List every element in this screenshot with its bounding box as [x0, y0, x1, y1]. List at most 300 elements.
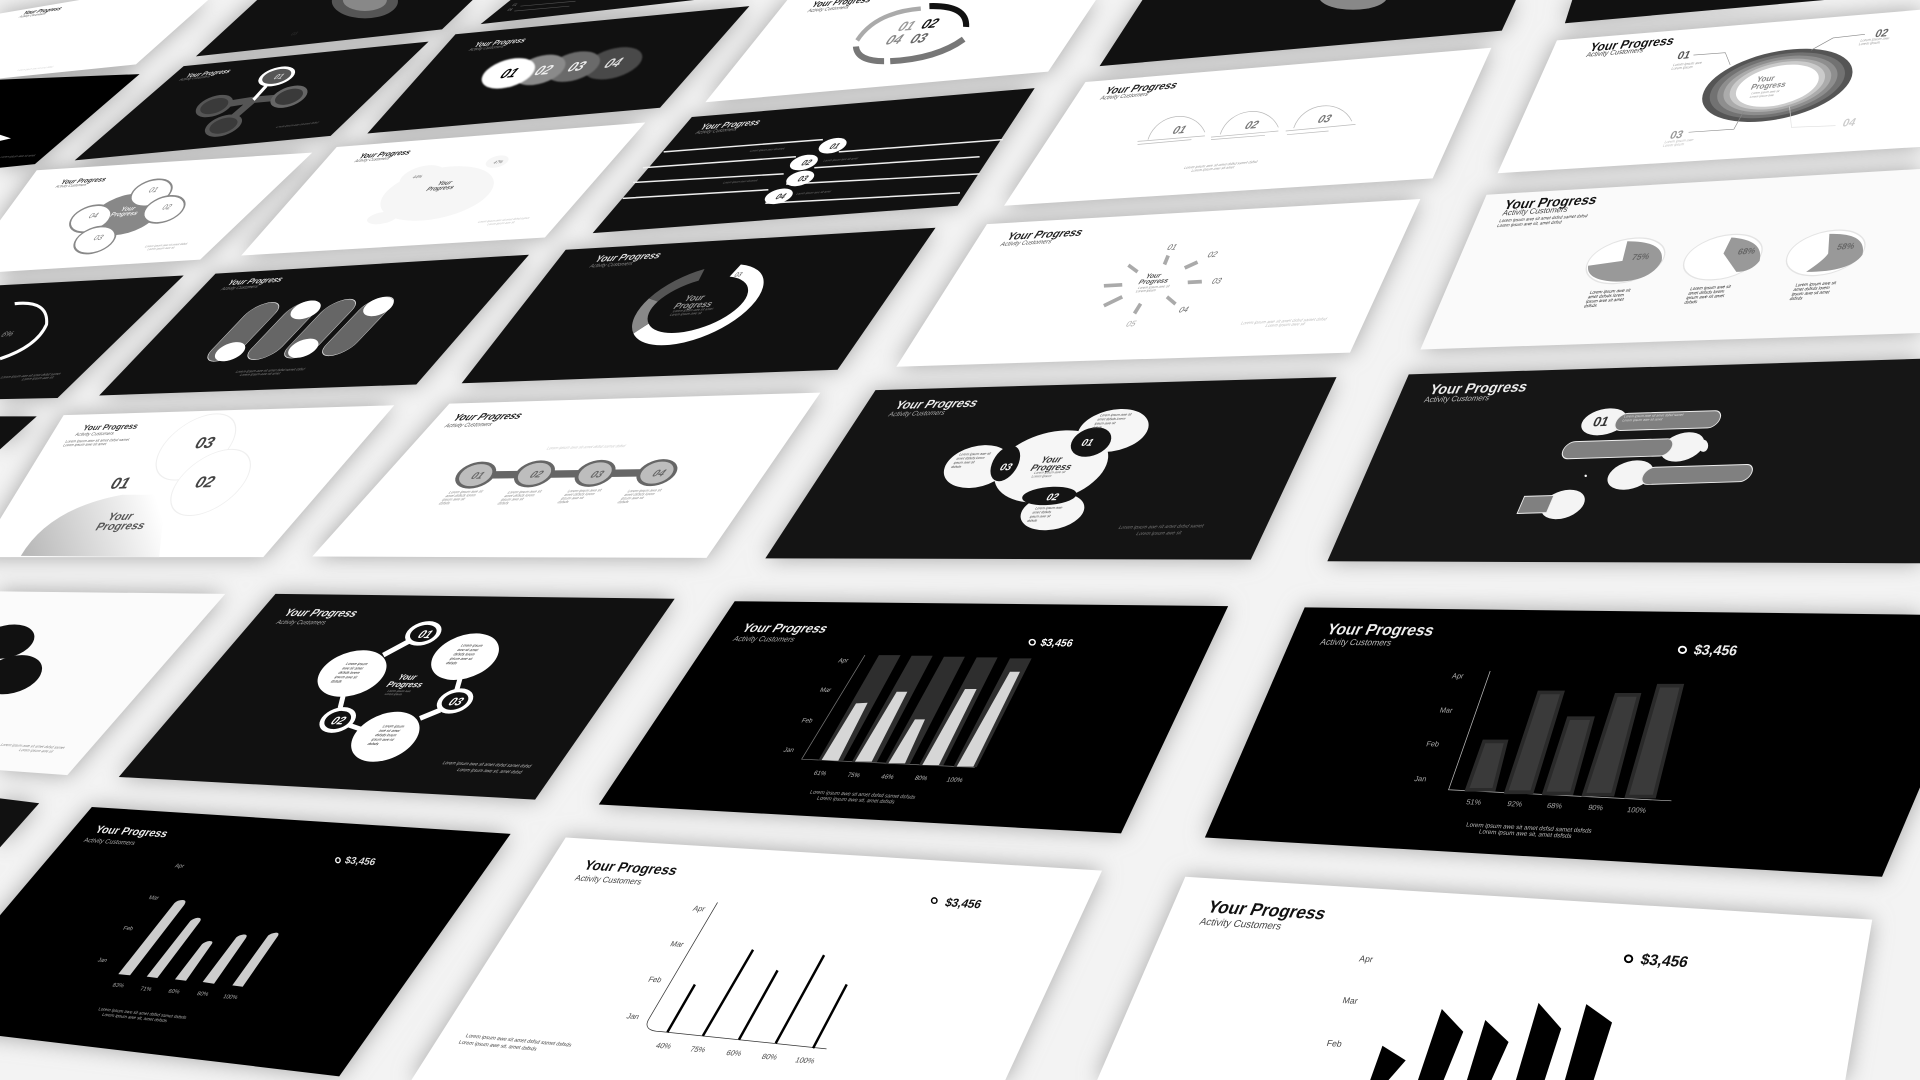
panel: white slide with concentric donut: Lorem ipsum	[1662, 142, 1685, 148]
panel: dark slide with four pills	[99, 255, 529, 396]
percent labels: 100%	[222, 994, 238, 1001]
panel: white slide with black petals: Lorem ipsum awe sit	[18, 748, 56, 754]
panel: top-left white slide: Your Progress	[20, 6, 64, 16]
panel: white slide with radial ticks: 04	[1177, 305, 1191, 314]
panel: dark slide with donut: Your Progress	[592, 250, 664, 265]
panel: top-left white slide: Activity Customers	[18, 11, 48, 19]
panel: dark slide with blob trefoil: Lorem ipsum awe sit	[1134, 531, 1183, 537]
panel: dark slide with process pills: Your Progress	[1427, 380, 1530, 398]
blob ring: 03	[445, 695, 468, 708]
panel: dark slide with ring of blobs: dsfsds	[329, 679, 344, 684]
panel: white slide with black petals	[0, 591, 225, 775]
black bars	[1370, 1003, 1612, 1080]
panel: white slide with thin bars: Lorem ipsum awe sit, amet dsfsds	[457, 1040, 538, 1053]
panel: white slide with 01 02 03 petals: Your Progress	[81, 421, 141, 432]
panel: white slide with chain of circles	[312, 393, 820, 558]
axis labels	[782, 658, 850, 754]
panel: white slide with black petals: Lorem ipsum awe sit amet dsfsd samet	[0, 742, 66, 750]
thin bars	[667, 950, 847, 1048]
value: $3,456	[943, 896, 984, 911]
panel: dark slide with blob trefoil: amet dsfsds lorem	[955, 456, 986, 461]
panel: left dark slide with ring: Lorem ipsum awe sit amet dsfsd samet	[0, 372, 63, 379]
panel: white slide with three bumps: Your Progress	[1102, 80, 1180, 97]
hub diagram: Progress	[108, 211, 139, 218]
panel: dark slide with ring of blobs: dsfsds lorem	[374, 733, 399, 737]
panel: white slide with chain of circles: amet dsfsds lorem	[503, 493, 537, 498]
faint blob	[364, 155, 511, 225]
panel: dark slide with donut	[462, 228, 936, 383]
panel: dark slide with blob trefoil: amet dsfsds	[1031, 510, 1052, 514]
panel: white slide with radial ticks	[896, 199, 1420, 367]
panel: dark slide with blob trefoil: ipsum awe sit	[1029, 514, 1053, 519]
panel: dark slide with donut: Lorem ipsum awe sit amet	[672, 306, 715, 313]
panel: white slide with three bumps: Activity Customers	[1098, 91, 1150, 102]
panel: dark slide with column chart: Your Progress	[739, 621, 831, 635]
panel: white slide with large black bars	[1097, 877, 1872, 1080]
axis labels: Jan	[782, 747, 796, 754]
panel: dark slide with blob trefoil: Progress	[1028, 462, 1074, 474]
panel: dark slide with blob trefoil	[765, 377, 1337, 560]
panel: light slide with three pies: Lorem ipsum awe sit, amet dsfsd	[1496, 219, 1563, 228]
percent labels: 46%	[879, 774, 895, 781]
hub diagram: 01	[146, 185, 162, 194]
panel: dark slide with hub and circles: Your Progress	[183, 67, 234, 79]
panel: white slide with chain of circles: ipsum awe sit	[560, 496, 586, 500]
panel: white slide with 01 02 03 petals: Lorem ipsum awe sit amet dsfsd samet	[64, 437, 131, 444]
trefoil diagram	[937, 408, 1155, 531]
panel: light slide with three pies: amet dsfsds lorem	[1687, 289, 1726, 296]
panel: white slide with radial ticks: 03	[1210, 276, 1224, 286]
row 02	[1559, 432, 1710, 462]
panel: top dark slide with list: 01	[511, 2, 519, 7]
pie chart 68%	[1675, 232, 1771, 282]
panel: white slide with 4-petal hub	[0, 153, 312, 272]
panel: white slide with chain of circles: Lorem ipsum awe sit	[566, 488, 604, 493]
percent labels: 100%	[794, 1056, 817, 1065]
blob ring: 01	[414, 628, 437, 641]
axis labels	[1325, 954, 1374, 1049]
trefoil diagram: 03	[997, 462, 1015, 473]
percent labels: 60%	[725, 1048, 744, 1058]
panel: white slide with chain of circles: ipsum awe sit	[500, 497, 526, 502]
axis labels: Feb	[647, 975, 663, 984]
panel: white slide with radial ticks: Your	[1144, 271, 1164, 280]
hub diagram	[65, 178, 190, 255]
axis labels: Feb	[1425, 739, 1440, 748]
panel: white slide with concentric donut: Lorem ipsum awe	[1860, 36, 1890, 43]
percent labels: 90%	[1587, 803, 1605, 812]
row 01: 01	[1590, 413, 1612, 429]
faint blob: Your	[435, 178, 455, 187]
panel: dark slide with ring of blobs: Lorem ipsum awe sit, amet dsfsd	[455, 768, 524, 775]
panel: light slide with three pies: ipsum awe sit amet	[1791, 290, 1831, 297]
panel: white slide with radial ticks: Activity Customers	[999, 239, 1054, 248]
black petals	[0, 624, 50, 695]
axis labels: Jan	[1413, 774, 1428, 783]
panel: top dark slide with list	[481, 0, 694, 24]
panel: white slide with concentric donut: 02	[1873, 28, 1890, 40]
panel: dark slide with ring of blobs: dsfsds lorem	[337, 670, 362, 675]
timeline nodes: 01	[827, 142, 843, 151]
overlapping number discs: 02	[529, 63, 557, 79]
panel: dark slide with four lines	[593, 88, 1035, 233]
panel: light slide with three pies: ipsum awe sit amet	[1585, 297, 1626, 304]
bump outlines	[1138, 106, 1356, 144]
pie chart 58%: 58%	[1835, 241, 1857, 252]
timeline nodes	[761, 137, 850, 205]
percent labels: 80%	[196, 991, 209, 998]
panel: white slide with chain of circles: Lorem ipsum awe sit	[626, 488, 664, 493]
panel: dark slide with blob trefoil: dsfsds	[1026, 519, 1038, 523]
rounded bars	[118, 900, 279, 987]
panel: dark slide with blob trefoil: dsfsds	[1091, 426, 1103, 430]
panel: white slide with 01 02 03 petals	[0, 405, 394, 557]
blob ring: 02	[327, 714, 350, 727]
faint blob: Progress	[424, 183, 457, 193]
panel: dark slide with process pills	[1327, 359, 1920, 563]
value: $3,456	[1638, 952, 1690, 971]
value: $3,456	[1038, 637, 1075, 649]
panel: dark slide with ring of blobs: Lorem ipsum	[345, 661, 369, 666]
panel: white slide with concentric donut: Lorem ipsum awe	[1664, 138, 1694, 144]
panel: dark slide with four pills: Your Progress	[224, 275, 286, 288]
panel: white slide with chain of circles: dsfsds	[616, 500, 631, 504]
row 03	[1584, 460, 1755, 490]
panel: dark slide with ring of blobs: Your	[395, 673, 420, 682]
panel: white slide with chain of circles: dsfsds	[496, 501, 511, 505]
panel: white slide with chain of circles: Lorem ipsum awe sit amet dsfsd samet dsfsd	[545, 444, 628, 450]
percent labels: 92%	[1506, 799, 1524, 809]
panel: top dark slide with concentric blob: 03	[289, 32, 299, 37]
panel: white slide with concentric donut: Lorem ipsum	[1858, 41, 1881, 46]
panel: top-left white slide	[0, 0, 208, 78]
panel: white slide with radial ticks: 05	[1124, 319, 1139, 328]
row 01: Lorem ipsum awe sit amet	[1622, 417, 1663, 422]
axis labels	[96, 864, 185, 964]
timeline lines	[623, 140, 1003, 203]
panel: dark slide with 01-04 discs: Your Progress	[472, 36, 529, 49]
panel: dark slide with blob trefoil: Lorem ipsum awe sit	[1033, 470, 1067, 475]
panel: dark slide with ring of blobs: Lorem ipsum	[383, 692, 403, 696]
axis labels: Mar	[147, 895, 160, 902]
panel: white slide with concentric donut: 04	[1840, 117, 1858, 129]
percent labels: 68%	[1546, 801, 1564, 810]
percent labels: 100%	[945, 777, 964, 784]
axis labels: Mar	[669, 940, 686, 949]
pie chart 68%: 68%	[1736, 246, 1757, 256]
panel: white slide with 4-petal hub: Activity Customers	[54, 182, 88, 189]
percent labels: 51%	[1465, 797, 1483, 807]
axis labels: Apr	[837, 658, 850, 664]
panel: dark slide with 01-04 discs	[367, 6, 749, 133]
faint petals	[141, 413, 265, 517]
bars	[1467, 686, 1682, 797]
panel: white slide with faint blob: Your Progress	[357, 148, 414, 160]
panel: dark slide with ring of blobs: dsfsds	[366, 742, 380, 746]
percent labels	[812, 770, 964, 784]
panel: dark slide with blob trefoil: Lorem ipsum awe sit	[958, 452, 992, 456]
row 01: Lorem ipsum awe sit amet dsfsd samet	[1623, 413, 1684, 419]
panel: white slide with 4-petal hub: Your Progress	[59, 175, 109, 186]
panel: dark slide with donut: Your	[681, 293, 708, 304]
gradient sweep	[21, 495, 165, 557]
panel: dark slide with four pills: Lorem ipsum awe sit amet dsfsd samet dsfsd	[234, 367, 307, 374]
panel: left dark slide with ring	[0, 276, 184, 399]
panel: white slide with radial ticks: 01	[1165, 242, 1180, 252]
value columns	[822, 672, 1020, 767]
hub diagram: 01	[271, 72, 287, 81]
panel: left dark slide with arrow: Lorem ipsum awe sit amet	[0, 154, 37, 159]
axis labels: Feb	[1325, 1038, 1343, 1049]
hub diagram: 03	[91, 233, 107, 242]
panel: white slide with large black bars: Your Progress	[1204, 897, 1330, 923]
overlapping number discs	[476, 45, 649, 91]
radial ticks	[1104, 256, 1202, 313]
axis labels: Apr	[1451, 671, 1465, 680]
panel: white slide with faint blob: Lorem ipsum awe sit amet dsfsd samet	[477, 216, 531, 224]
panel: dark slide with blob trefoil: dsfsds	[950, 465, 962, 469]
hub diagram: Your	[119, 206, 137, 213]
panel: light slide with three pies: ipsum awe sit amet	[1685, 293, 1726, 300]
panel: top white slide with segmented ring: 04	[881, 32, 908, 48]
panel: dark slide with rounded bars: Lorem ipsum awe sit, amet dsfsds	[101, 1012, 169, 1023]
concentric donut: Lorem ipsum awe sit	[1751, 89, 1780, 95]
faint blob: 47%	[491, 160, 505, 166]
panel: light slide with three pies: Lorem ipsum awe sit	[1795, 280, 1837, 287]
percent labels	[654, 1041, 817, 1065]
panel: dark slide with blob trefoil: Lorem ipsum	[1030, 474, 1053, 478]
panel: dark slide with bar chart: Lorem ipsum awe sit amet dsfsd samet dsfsds	[1465, 822, 1593, 835]
panel: white slide with concentric donut: 01	[1675, 50, 1693, 62]
panel: dark slide with ring of blobs: Activity Customers	[274, 620, 328, 626]
percent labels: 83%	[111, 983, 125, 989]
panel: dark slide with blob trefoil: ipsum awe sit	[1093, 421, 1117, 426]
panel: left dark slide with arrow	[0, 74, 140, 168]
panel: light slide with three pies: Activity Customers	[1501, 205, 1570, 217]
panel: dark slide with blob trefoil: Lorem ipsum awe	[1034, 506, 1063, 510]
panel: dark slide with column chart: Lorem ipsum awe sit, amet dsfsds	[815, 796, 896, 805]
panel: dark slide with ring of blobs: Lorem ipsum awe sit amet dsfsd samet dsfsd	[441, 761, 533, 769]
panel: dark slide with blob trefoil: Your	[1038, 455, 1065, 466]
panel: dark slide with four pills: Activity Customers	[219, 284, 260, 292]
panel: dark slide with bar chart: Your Progress	[1324, 621, 1437, 639]
axis labels: Apr	[691, 904, 707, 913]
panel: white slide with radial ticks: Lorem ipsum	[1135, 289, 1157, 293]
panel: dark slide with ring of blobs: Lorem ipsum awe	[386, 689, 412, 693]
percent labels: 80%	[913, 775, 929, 782]
circle chain: 04	[649, 468, 670, 479]
hub diagram: 02	[160, 202, 175, 211]
panel: dark slide with four lines: Activity Customers	[693, 127, 738, 136]
panel: light slide with three pies: Lorem ipsum awe sit	[1689, 284, 1732, 291]
row 01	[1576, 408, 1723, 436]
panel: dark slide with column chart: Lorem ipsum awe sit amet dsfsd samet dsfsds	[808, 790, 916, 801]
panel: dark slide with blob trefoil: Lorem ipsum awe sit amet dsfsd samet	[1117, 524, 1205, 531]
panel: white slide with chain of circles: Lorem ipsum awe sit	[506, 489, 544, 494]
panel: dark slide with bar chart: Activity Customers	[1319, 637, 1394, 647]
panel: dark slide with hub and circles: Activity Customers	[178, 74, 213, 82]
panel: dark slide with hub and circles	[75, 42, 429, 160]
panel: white slide with thin bars: Activity Customers	[573, 873, 644, 886]
panel: white slide with three bumps: Lorem ipsum awe sit amet dsfsd samet dsfsd	[1183, 159, 1259, 170]
chart axis	[647, 902, 827, 1049]
panel: white slide with 01 02 03 petals: Activity Customers	[74, 431, 116, 438]
panel: white slide with 4-petal hub: Lorem ipsum awe sit	[146, 246, 176, 251]
panel: dark slide with donut: Progress	[671, 300, 716, 311]
panel: dark slide with column chart	[599, 601, 1228, 833]
panel: dark slide with ring of blobs: awe sit amet	[456, 648, 481, 652]
faint blob: 44%	[410, 174, 424, 180]
pie chart 75%: 75%	[1630, 251, 1651, 262]
panel: white slide with chain of circles: Your Progress	[450, 410, 526, 423]
panel: white slide with chain of circles: ipsum awe sit	[441, 497, 467, 502]
panel: dark slide with ring of blobs: ipsum awe sit	[448, 656, 475, 661]
panel: white slide with three bumps: 02	[1242, 118, 1262, 132]
concentric donut: Lorem ipsum awe	[1749, 93, 1775, 99]
percent labels: 60%	[167, 989, 181, 995]
panel: dark slide with ring of blobs: awe sit amet	[378, 728, 402, 733]
panel: top white slide with segmented ring: 03	[906, 31, 932, 47]
panel: white slide with large black bars: Activity Customers	[1198, 917, 1283, 932]
trefoil diagram: 01	[1078, 437, 1096, 449]
panel: white slide with chain of circles: amet dsfsds lorem	[623, 492, 657, 497]
timeline nodes: 02	[799, 158, 815, 167]
panel: white slide with 01 02 03 petals: Progress	[93, 519, 149, 533]
panel: white slide with concentric donut: Lorem ipsum	[1671, 65, 1693, 71]
panel: white slide with faint blob: Activity Customers	[352, 156, 392, 164]
panel: light slide with three pies: Your Progress	[1502, 192, 1600, 212]
panel: dark slide with ring of blobs: Your Progress	[281, 607, 362, 619]
panel: dark slide with bar chart	[1205, 607, 1920, 877]
circle chain: 03	[587, 469, 608, 480]
timeline nodes: 03	[795, 174, 811, 183]
hub diagram: 04	[86, 211, 102, 220]
panel: dark slide with blob trefoil: Activity Customers	[887, 408, 948, 418]
panel: white slide with three bumps: 03	[1315, 112, 1335, 126]
chart axis	[802, 655, 975, 767]
panel: white slide with chain of circles: ipsum awe sit	[620, 496, 646, 500]
concentric donut	[1688, 43, 1867, 128]
panel: light slide with three pies: Lorem ipsum awe sit	[1589, 288, 1631, 295]
panel: white slide with thin bars	[411, 838, 1102, 1080]
panel: dark slide with four lines: Lorem ipsum awe sit amet	[722, 179, 759, 185]
panel: top dark slide with gray blob	[1100, 0, 1516, 66]
panel: dark slide with rounded bars	[0, 807, 511, 1076]
circle chain: 02	[526, 469, 547, 480]
concentric donut: Your	[1755, 73, 1777, 84]
panel: light slide with three pies: Lorem ipsum awe sit amet dsfsd samet dsfsd	[1498, 213, 1589, 223]
panel: white slide with 01 02 03 petals: Your	[105, 510, 137, 523]
blob ring	[308, 621, 509, 762]
axis labels	[1413, 671, 1465, 783]
panel: top-left white slide: Lorem ipsum awe sit amet dsfsd	[16, 65, 55, 72]
background columns	[818, 655, 1032, 767]
panel: dark slide with ring of blobs	[119, 594, 675, 800]
panel: dark slide with blob trefoil: ipsum awe sit	[953, 461, 977, 465]
percent labels: 75%	[846, 772, 862, 779]
callout lines	[1689, 34, 1865, 132]
overlapping number discs: 01	[495, 66, 523, 82]
panel: top white slide with segmented ring: 02	[917, 16, 943, 32]
panel: light slide with three pies: dsfsds	[1684, 299, 1699, 305]
axis labels: Feb	[800, 718, 814, 724]
axis labels: Apr	[1358, 954, 1374, 964]
panel: small dark slide at left edge	[0, 416, 37, 449]
panel: white slide with 01 02 03 petals: 01	[106, 474, 136, 493]
panel: light slide with three pies: dsfsds	[1583, 303, 1599, 308]
panel: white slide with 01 02 03 petals: Lorem ipsum awe sit amet	[62, 441, 109, 447]
panel: white slide with concentric donut	[1498, 10, 1920, 173]
panel: light slide with three pies: dsfsds	[1789, 296, 1804, 301]
overlapping number discs: 04	[599, 56, 627, 71]
panel: dark slide with rounded bars: Lorem ipsum awe sit amet dsfsd samet dsfsds	[97, 1006, 188, 1020]
percent labels: 80%	[760, 1052, 779, 1062]
panel: white slide with radial ticks: Lorem ipsum awe sit	[1264, 321, 1307, 328]
panel: white slide with radial ticks: Lorem ipsum awe sit	[1137, 284, 1171, 290]
panel: white slide with faint blob	[241, 122, 645, 256]
panel: white slide with chain of circles: dsfsds	[556, 500, 571, 504]
panel: white slide with 01 02 03 petals: 03	[191, 433, 220, 452]
panel: light slide with three pies: amet dsfsds lorem	[1793, 285, 1831, 292]
axis labels: Jan	[96, 958, 108, 964]
overlapping number discs: 03	[563, 59, 590, 75]
panel: white slide with 01 02 03 petals: 02	[191, 472, 220, 491]
circle chain: 01	[467, 470, 489, 481]
trefoil diagram: 02	[1043, 492, 1061, 503]
panel: light slide with three pies	[1420, 169, 1920, 349]
panel: top white slide with segmented ring: Activity Customers	[806, 5, 850, 14]
panel: top white slide with segmented ring: 01	[894, 18, 920, 35]
panel: light slide with three pies: amet dsfsds lorem	[1587, 292, 1625, 299]
panel: white slide with chain of circles: dsfsds	[437, 501, 453, 505]
axis labels: Jan	[625, 1012, 641, 1021]
panel: dark slide with rounded bars: Activity Customers	[82, 837, 137, 847]
axis labels: Feb	[122, 926, 134, 932]
panel: dark slide with rounded bars: Your Progress	[93, 824, 170, 840]
panel: dark slide with four lines: Lorem ipsum awe sit amet	[795, 190, 832, 196]
panel: white slide with chain of circles: amet dsfsds lorem	[444, 493, 478, 498]
panel: dark slide with ring of blobs: ipsum awe sit	[333, 675, 360, 679]
panel: dark slide with donut: Lorem ipsum awe sit	[669, 310, 704, 317]
panel: top-right dark slide	[1565, 0, 1824, 23]
axis labels: Apr	[174, 864, 185, 870]
hub diagram	[191, 65, 312, 139]
panel: white slide with concentric donut: Activity Customers	[1585, 46, 1646, 59]
circle chain	[450, 459, 683, 489]
panel: dark slide with hub and circles: Lorem ipsum awe sit amet dsfsd	[275, 121, 320, 129]
panel: white slide with three bumps: Lorem ipsum awe sit amet	[1190, 164, 1237, 173]
percent labels: 75%	[688, 1045, 707, 1054]
panel: left dark slide with ring: Lorem ipsum awe sit	[20, 375, 56, 381]
axis labels: Mar	[1341, 995, 1359, 1006]
row 04	[1517, 489, 1590, 520]
panel: white slide with chain of circles: Activity Customers	[442, 422, 495, 429]
panel: dark slide with blob trefoil: Your Progress	[892, 396, 982, 412]
pills	[200, 296, 401, 362]
panel: dark slide with four lines: Lorem ipsum awe sit amet	[822, 157, 859, 162]
panel: dark slide with 01-04 discs: Activity Customers	[467, 44, 506, 53]
panel: white slide with faint blob: Lorem ipsum awe sit	[486, 221, 516, 226]
panel: white slide with radial ticks: Your Progress	[1004, 226, 1087, 243]
panel: white slide with 4-petal hub: Lorem ipsum awe sit amet dsfsd	[144, 242, 188, 248]
panel: dark slide with process pills: Activity Customers	[1423, 394, 1491, 404]
panel: white slide with concentric donut: Your Progress	[1588, 33, 1677, 54]
panel: dark slide with ring of blobs: Progress	[384, 680, 426, 689]
panel: white slide with three bumps	[1004, 48, 1491, 206]
panel: white slide with thin bars: Lorem ipsum awe sit amet dsfsd samet dsfsds	[464, 1033, 572, 1048]
panel: dark slide with donut: Activity Customers	[588, 262, 634, 269]
panel: dark slide with bar chart: Lorem ipsum awe sit, amet dsfsds	[1478, 828, 1572, 840]
